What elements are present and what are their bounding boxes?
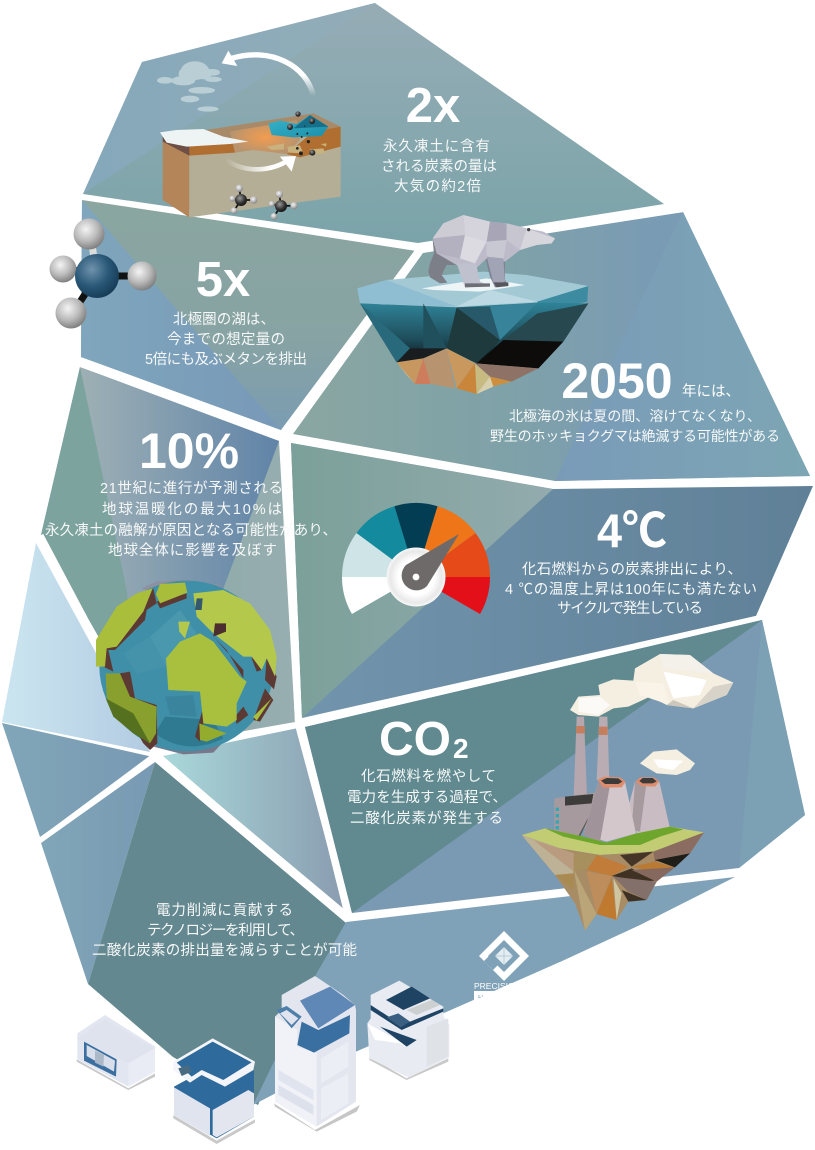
- printer: compact: [77, 1015, 155, 1090]
- clouds: [157, 61, 222, 112]
- heading: 2050: 2050: [561, 353, 673, 409]
- text: technology description: テクノロジーを利用して、: [147, 922, 304, 939]
- icon: low-poly globe: [96, 579, 277, 754]
- text: 2050 description: 北極海の氷は夏の間、溶けてなくなり、: [509, 408, 761, 424]
- panel: wedge below globe: [163, 728, 344, 913]
- text: CO2 description: 二酸化炭素が発生する: [350, 810, 503, 827]
- text: CO2 description: [347, 767, 507, 827]
- printer: tall floor model: [274, 976, 360, 1132]
- text: technology description: [92, 902, 358, 959]
- chart: temperature gauge: [342, 503, 490, 614]
- icon: methane molecule: [50, 218, 156, 328]
- panel: lower-left facet: [2, 723, 153, 837]
- snow: [160, 129, 248, 147]
- text: 2050 description: [490, 408, 780, 444]
- heading: 5x: 5x: [196, 253, 250, 307]
- text: CO2 description: 化石燃料を燃やして: [361, 767, 496, 785]
- molecules: [229, 111, 315, 220]
- text: CO2 description: 電力を生成する過程で、: [347, 789, 507, 806]
- text: 2x description: 永久凍土に含有: [383, 138, 490, 155]
- cooling towers: [629, 782, 670, 833]
- text: 2050 description: 野生のホッキョクグマは絶滅する可能性がある: [490, 428, 780, 444]
- heading: 4 degrees: 4℃: [597, 504, 667, 557]
- text: 5x description: 北極圏の湖は、: [173, 311, 275, 328]
- text: 10% description: 地球温暖化の最大10%は: [102, 501, 282, 518]
- panel: CO2 power generation: [305, 620, 805, 913]
- icon: permafrost block: [157, 51, 341, 220]
- icon: printers: [77, 976, 449, 1144]
- text: 2x description: される炭素の量は: [381, 158, 497, 175]
- smoke clouds: [570, 654, 733, 775]
- chimneys: [573, 717, 587, 805]
- turbine hall: [554, 793, 595, 837]
- white dividers: [38, 196, 815, 918]
- arrow: lower curved: [226, 156, 296, 172]
- text: 4 degrees description: サイクルで発生している: [557, 600, 703, 617]
- heading: CO2: CO: [379, 713, 451, 766]
- panel: left ice facet: [2, 543, 150, 752]
- rock: [522, 832, 704, 931]
- text: 2x description: [381, 138, 497, 195]
- continents: [100, 588, 277, 750]
- icon: gauge needle: [402, 534, 459, 590]
- heading: 10%: 10%: [139, 423, 239, 479]
- text: 10% description: [45, 480, 337, 559]
- heading: 2x: 2x: [406, 79, 460, 133]
- text: 年には: 年には、: [682, 383, 740, 400]
- icon: company logo: HE: [478, 995, 496, 1002]
- text: technology description: 二酸化炭素の排出量を減らすことが可能: [92, 942, 358, 959]
- text: 4 degrees description: [505, 560, 757, 617]
- arrow: upper curved: [222, 51, 313, 96]
- text: 10% description: 21世紀に進行が予測される: [100, 480, 283, 497]
- text: 2x description: 大気の約2倍: [394, 178, 481, 195]
- text: 4 degrees description: 化石燃料からの炭素排出により、: [522, 560, 742, 578]
- panel: 4 degrees: [291, 443, 813, 718]
- panel: bottom reduction technology: [41, 762, 735, 1105]
- icon: company logo: [474, 931, 529, 1003]
- bear: [428, 240, 457, 283]
- printer: multifunction: [173, 1038, 255, 1144]
- text: 5x description: 今までの想定量の: [167, 331, 285, 348]
- text: logo name: PRECISION: [474, 981, 521, 991]
- panel: 10 percent global warming: [41, 367, 295, 746]
- printer: office copier: [367, 981, 449, 1080]
- text: 4 degrees description: 4 ℃の温度上昇は100年にも満たない: [505, 581, 757, 598]
- text: 10% description: 永久凍土の融解が原因となる可能性があり、: [45, 522, 337, 539]
- panel: 2x permafrost carbon: [83, 3, 664, 243]
- heading: CO2: 2: [453, 733, 469, 764]
- text: 10% description: 地球全体に影響を及ぼす: [108, 542, 277, 559]
- white mask over logo: [448, 962, 560, 1012]
- text: technology description: 電力削減に貢献する: [156, 902, 293, 919]
- text: 5x description: [145, 311, 307, 368]
- panel: 2050 arctic ice: [293, 212, 810, 481]
- icon: polar bear on iceberg: [357, 215, 588, 394]
- icon: floating power plant: [522, 654, 733, 931]
- grass top: [522, 827, 704, 855]
- panel: 5x methane lakes: [81, 200, 415, 430]
- text: 5x description: 5倍にも及ぶメタンを排出: [145, 351, 307, 368]
- logo band: [474, 991, 516, 1003]
